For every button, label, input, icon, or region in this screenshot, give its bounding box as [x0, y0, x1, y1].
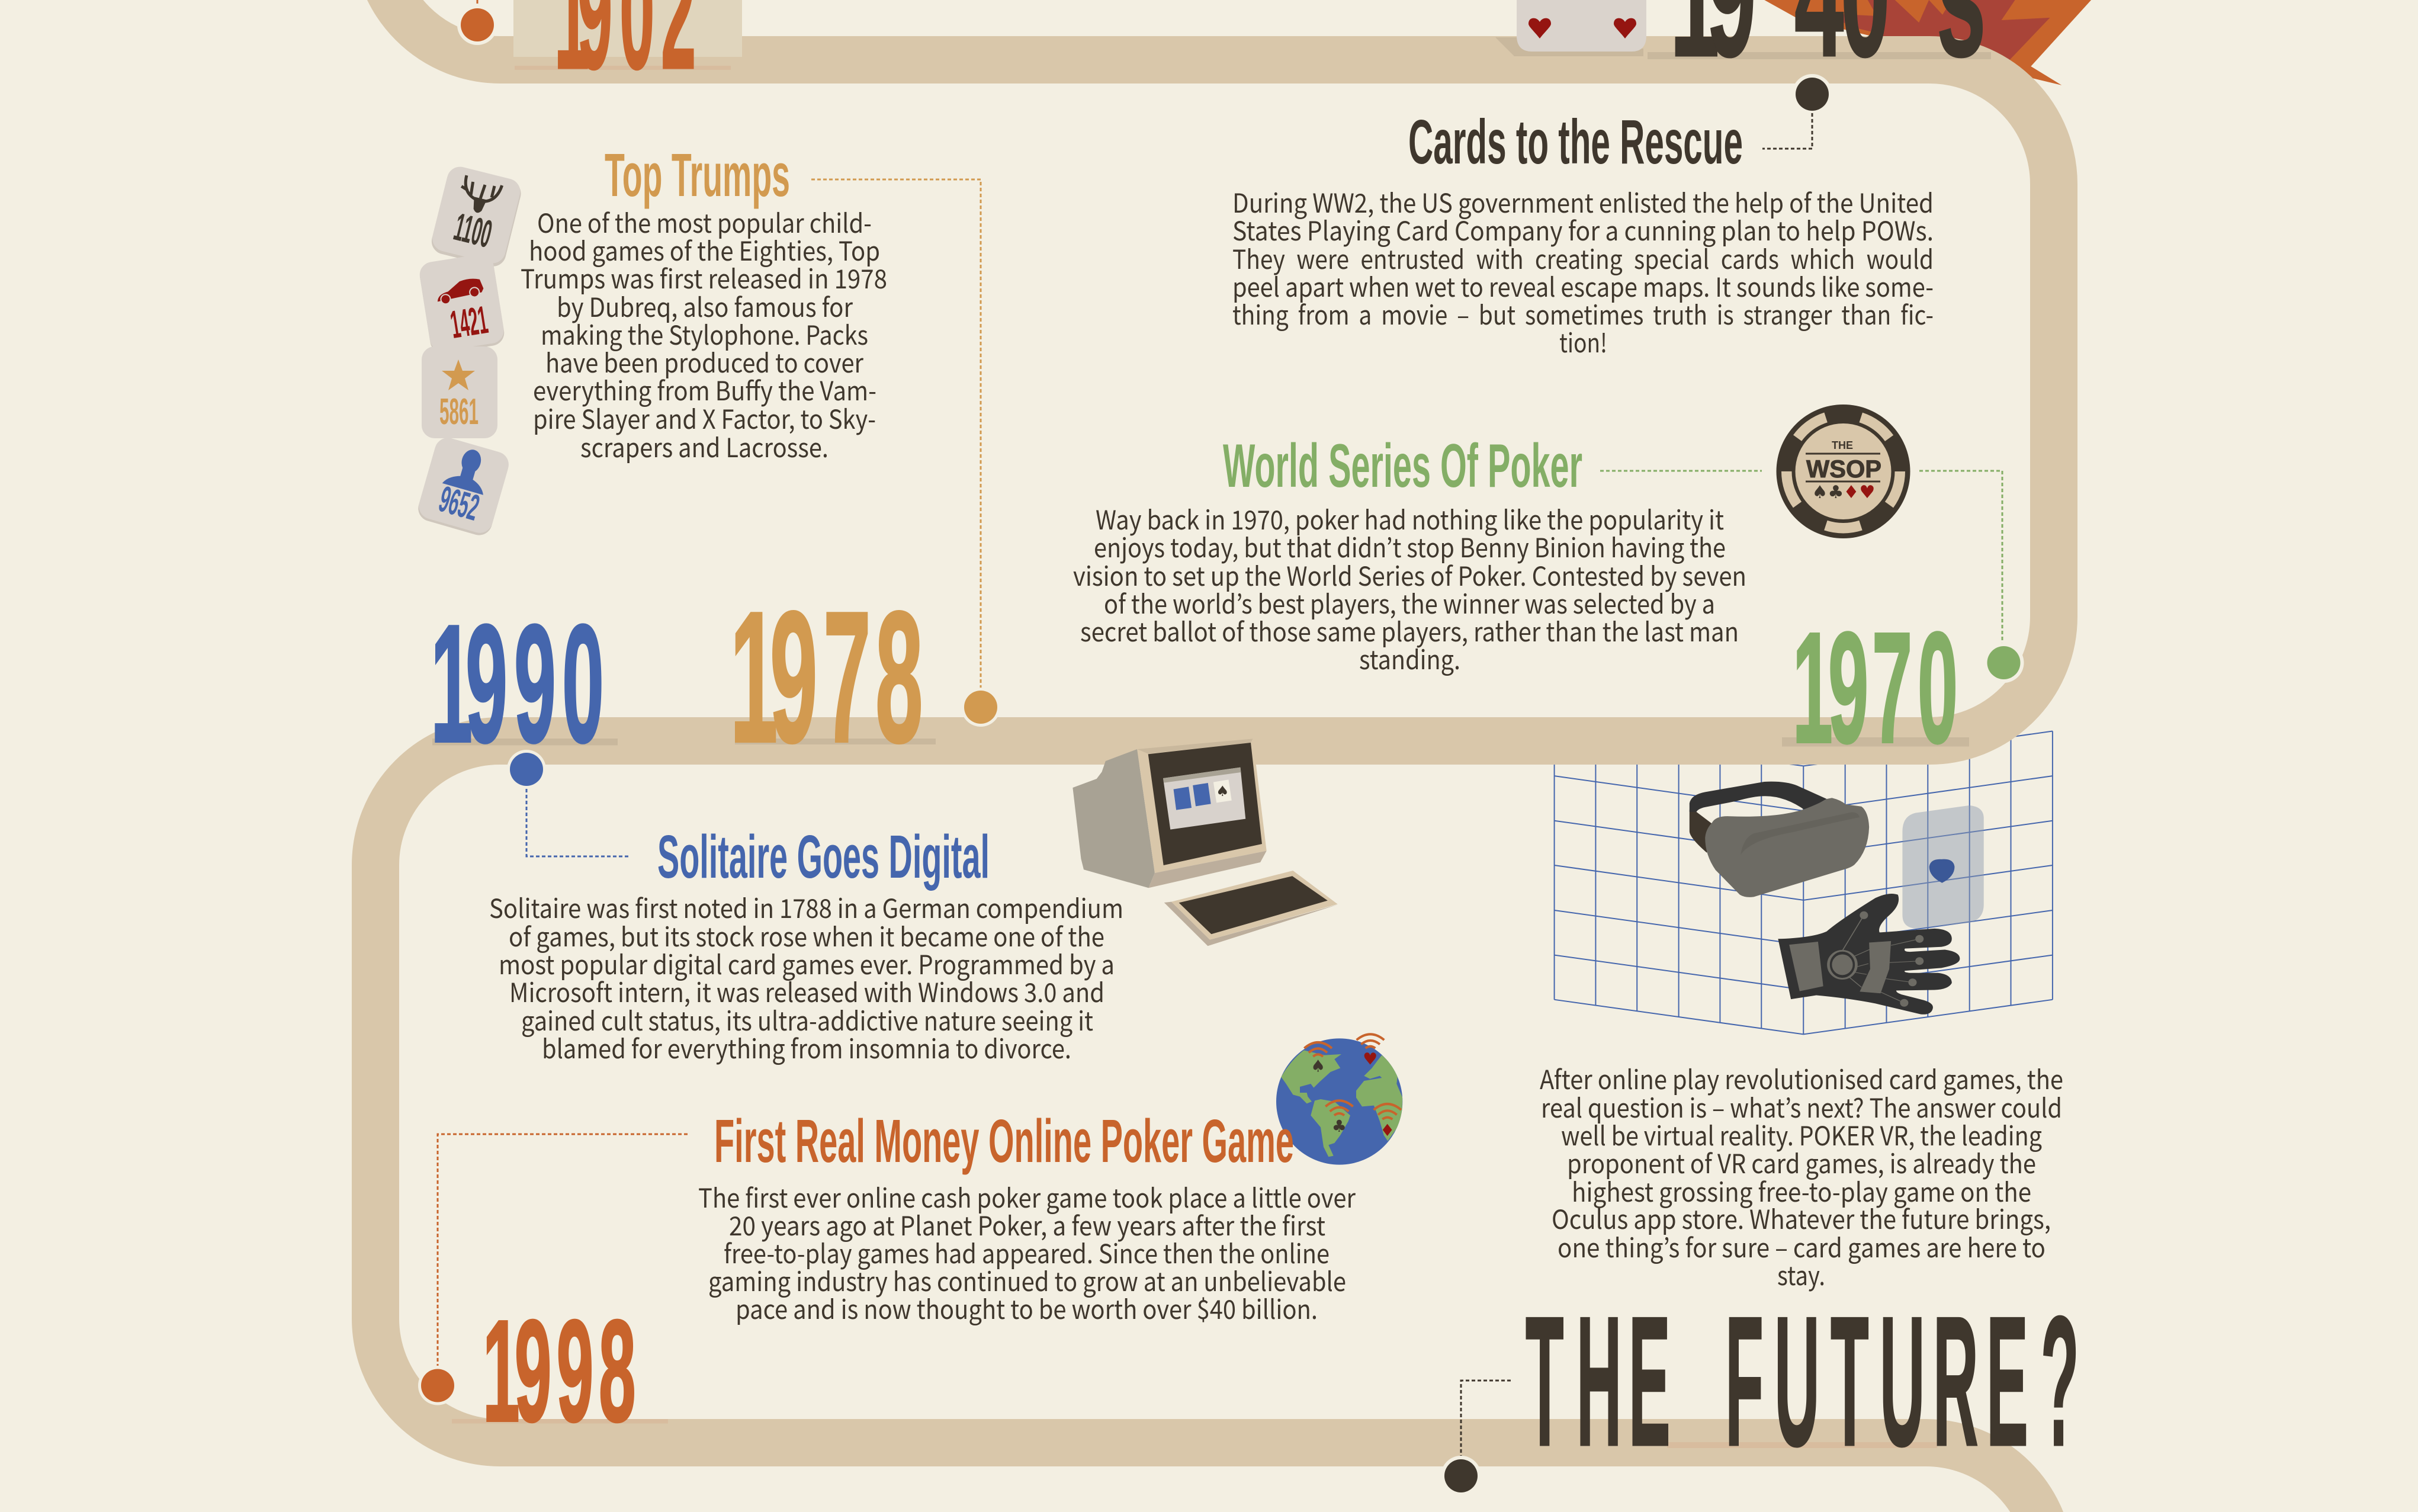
text: Cards to the Rescue body: During WW2, the US government enlisted the help of the United	[1232, 182, 1934, 220]
text: World Series body: standing.	[1359, 639, 1460, 677]
text: online poker body: 20 years ago at Planet Poker, a few years after the first	[729, 1205, 1325, 1243]
panel: Cards to the Rescue	[1232, 107, 1934, 360]
text: Top Trumps body: scrapers and Lacrosse.	[580, 427, 829, 465]
text: the future body: real question is – what’s next? The answer could	[1541, 1087, 2062, 1125]
text: World Series body: secret ballot of those same players, rather than the last man	[1080, 611, 1739, 649]
text: the future body: Oculus app store. Whatever the future brings,	[1552, 1199, 2051, 1237]
heading: Top Trumps: Top Trumps	[605, 141, 790, 209]
year 1978: 1978	[730, 573, 923, 781]
icon: globe with wifi suits	[1276, 1034, 1402, 1165]
marker 1978	[961, 688, 1000, 727]
text: the future body: highest grossing free-to-play game on the	[1572, 1171, 2031, 1209]
icon: globe with wifi suits: ♣	[1332, 1116, 1347, 1136]
icon: WSOP poker chip	[1777, 405, 1910, 538]
icon: WSOP poker chip: THE	[1832, 439, 1853, 451]
text: Solitaire body: Solitaire was first noted in 1788 in a German compendium	[489, 888, 1123, 926]
text: Top Trumps body: pire Slayer and X Factor, to Sky-	[533, 399, 876, 436]
heading: First Real Money Online Poker Game: First Real Money Online Poker Game	[714, 1107, 1294, 1175]
icon: WSOP poker chip: ♦	[1844, 482, 1859, 503]
text: Top Trumps body: hood games of the Eighties, Top	[529, 230, 880, 268]
panel: Top Trumps	[521, 141, 981, 688]
marker 1902	[457, 0, 497, 45]
year 1998: 1998	[483, 1291, 636, 1452]
text: online poker body: free-to-play games had appeared. Since then the online	[724, 1233, 1330, 1271]
icon: retro computer	[1072, 739, 1338, 946]
icon: globe with wifi suits: ♠	[1311, 1056, 1325, 1076]
year 1990: 1990	[431, 589, 604, 778]
year 1970: 1970	[1793, 600, 1958, 776]
marker the future	[1441, 1381, 1511, 1496]
marker 1998	[418, 1366, 457, 1405]
text: Top Trumps body: One of the most popular child-	[537, 203, 872, 240]
text: the future body	[1540, 1059, 2063, 1293]
text: the future body: After online play revolutionised card games, the	[1540, 1059, 2063, 1097]
icon: VR headset	[1690, 782, 1869, 897]
text: online poker body: gaming industry has continued to grow at an unbelievable	[708, 1261, 1346, 1299]
connector: World Series left	[1600, 470, 1762, 471]
icon: card 1421 car: 1421	[448, 297, 490, 346]
text: Cards to the Rescue body	[1232, 182, 1934, 360]
icon: card 1100 deer: 1100	[450, 204, 496, 256]
text: online poker body: pace and is now thought to be worth over $40 billion.	[736, 1289, 1318, 1327]
text: Top Trumps body	[521, 203, 887, 465]
heading: World Series Of Poker: World Series Of Poker	[1223, 432, 1582, 500]
text: Solitaire body: Microsoft intern, it was released with Windows 3.0 and	[509, 972, 1104, 1010]
VR wireframe grid	[1555, 731, 2053, 1034]
text: World Series body: vision to set up the World Series of Poker. Contested by seven	[1073, 556, 1746, 593]
icon: WSOP poker chip: ♣	[1828, 482, 1844, 503]
icon: WSOP poker chip: ♥	[1860, 482, 1875, 503]
heading: Cards to the Rescue: Cards to the Rescue	[1408, 107, 1743, 177]
icon: card 9652 person: 9652	[435, 479, 484, 529]
text: online poker body	[698, 1177, 1356, 1327]
icon: globe with wifi suits: ♥	[1363, 1049, 1377, 1069]
text: Top Trumps body: have been produced to cover	[545, 342, 864, 380]
text: the future body: well be virtual reality. POKER VR, the leading	[1561, 1115, 2042, 1153]
text: Solitaire body	[489, 888, 1123, 1066]
text: Solitaire body: of games, but its stock rose when it became one of the	[509, 916, 1104, 954]
icon: VR glove	[1778, 894, 1960, 1015]
marker 1990	[507, 750, 629, 856]
icon: globe with wifi suits: ♦	[1380, 1121, 1395, 1140]
text: the future body: one thing’s for sure – card games are here to	[1558, 1227, 2045, 1265]
text: World Series body	[1073, 499, 1746, 677]
text: the future body: proponent of VR card games, is already the	[1567, 1143, 2036, 1181]
text: Cards to the Rescue body: tion!	[1559, 322, 1607, 360]
text: Cards to the Rescue body: States Playing Card Company for a cunning plan to help POWs.	[1232, 210, 1934, 248]
text: Solitaire body: most popular digital card games ever. Programmed by a	[499, 944, 1115, 982]
heading: Solitaire Goes Digital: Solitaire Goes Digital	[657, 823, 990, 891]
heading: THE FUTURE?: THE FUTURE?	[1526, 1279, 2079, 1485]
text: the future body: stay.	[1777, 1255, 1825, 1293]
burst behind 1940s	[1764, 0, 2091, 85]
text: online poker body: The first ever online cash poker game took place a little over	[698, 1177, 1356, 1215]
text: Solitaire body: blamed for everything from insomnia to divorce.	[542, 1028, 1071, 1066]
text: Top Trumps body: Trumps was first released in 1978	[521, 258, 887, 296]
panel: World Series Of Poker	[1073, 432, 2002, 677]
text: Top Trumps body: by Dubreq, also famous for	[557, 287, 853, 325]
icon: playing card with hearts	[1495, 0, 1646, 56]
connector: online poker	[438, 1134, 688, 1366]
marker 1970	[1984, 643, 2024, 683]
text: World Series body: of the world’s best players, the winner was selected by a	[1104, 583, 1715, 621]
text: World Series body: Way back in 1970, poker had nothing like the popularity it	[1096, 499, 1724, 537]
icon: card 5861 star	[422, 346, 497, 438]
text: Top Trumps body: everything from Buffy the Vam-	[533, 370, 876, 408]
timeline road	[375, 0, 2054, 1512]
icon: card 1100 deer	[429, 164, 524, 269]
icon: WSOP poker chip: WSOP	[1806, 455, 1881, 483]
panel: Solitaire Goes Digital	[489, 823, 1123, 1066]
panel: First Real Money Online Poker Game	[438, 1107, 1356, 1366]
icon: WSOP poker chip: ♠	[1812, 482, 1828, 503]
connector: World Series right	[1919, 471, 2002, 644]
icon: card 1421 car	[418, 252, 506, 355]
marker 1940s	[1762, 74, 1832, 149]
year 1902	[513, 0, 742, 103]
icon: card 9652 person	[415, 435, 512, 538]
text: World Series body: enjoys today, but that didn’t stop Benny Binion having the	[1094, 527, 1726, 565]
text: Cards to the Rescue body: peel apart when wet to reveal escape maps. It sounds like some-	[1232, 267, 1934, 304]
text: Solitaire body: gained cult status, its ultra-addictive nature seeing it	[521, 1000, 1093, 1038]
icon: card 5861 star: 5861	[439, 391, 479, 432]
icon: virtual card with heart	[1902, 805, 1984, 929]
text: Cards to the Rescue body: They were entrusted with creating special cards which would	[1232, 239, 1934, 277]
icon: retro computer: ♠	[1216, 783, 1229, 800]
connector: Top Trumps	[811, 179, 981, 688]
text: Top Trumps body: making the Stylophone. Packs	[541, 314, 868, 352]
text: Cards to the Rescue body: thing from a movie – but sometimes truth is stranger than fic-	[1232, 294, 1934, 332]
